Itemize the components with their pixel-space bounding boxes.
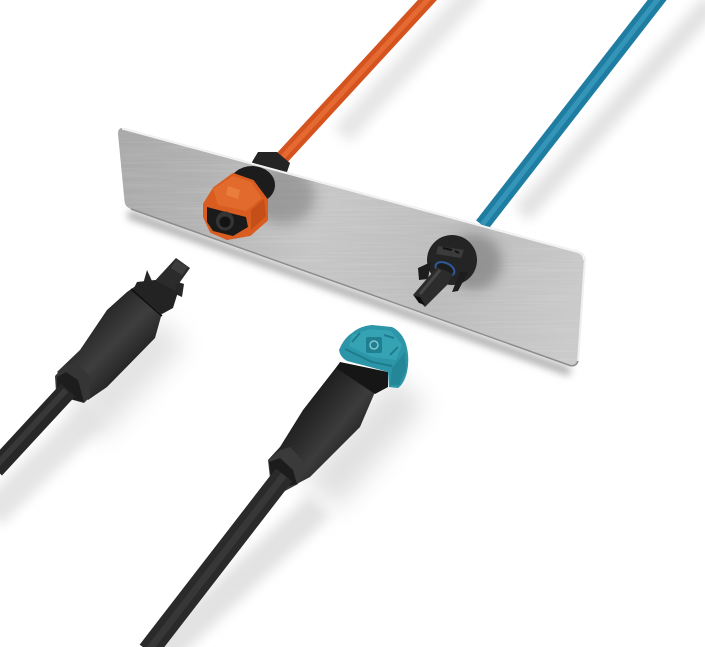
- teal head: [339, 325, 408, 388]
- cable: [0, 390, 68, 469]
- black collar: [229, 166, 275, 204]
- connector opening: [207, 207, 248, 236]
- left black connector: [0, 258, 190, 469]
- end cap: [268, 447, 304, 492]
- cable: [148, 475, 284, 647]
- pin: [413, 267, 453, 307]
- end cap: [55, 363, 90, 403]
- metal plate: [118, 128, 586, 366]
- latch tabs: [143, 270, 184, 297]
- orange connector grommet behind plate: [252, 152, 290, 172]
- pin: [152, 258, 190, 296]
- orange head: [204, 174, 267, 239]
- blue cable: [482, 0, 661, 225]
- orange connector: [204, 166, 275, 239]
- body: [57, 285, 162, 400]
- orange cable: [280, 0, 432, 160]
- round flange: [427, 235, 477, 285]
- blue seal: [433, 259, 457, 279]
- collar: [133, 280, 178, 314]
- body: [268, 365, 375, 485]
- dark neck: [336, 362, 388, 394]
- black connector on plate: [413, 235, 477, 307]
- teal-headed black connector: [148, 325, 408, 647]
